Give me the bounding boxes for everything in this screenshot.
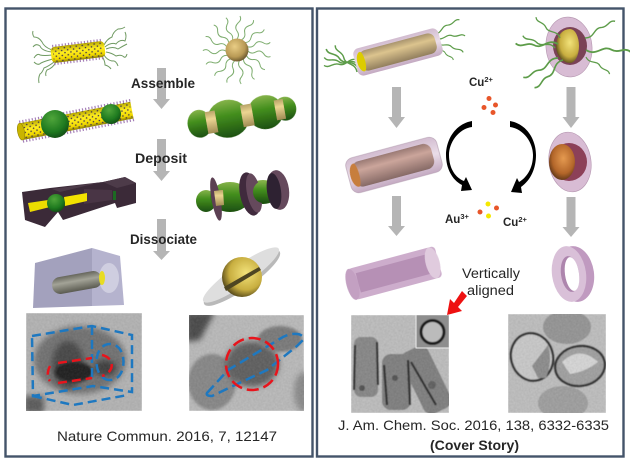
arrow: right column step 2 (562, 197, 580, 237)
heading: Deposit: Deposit (135, 150, 187, 166)
arrow: curved black left (446, 121, 472, 191)
panel: left, Nature Commun. assembly route (6, 8, 314, 456)
icon: rod in dark cuboid shell segments (22, 177, 136, 227)
label: Au3+: Au (445, 214, 460, 226)
arrow: left column step 2 (388, 196, 405, 236)
icon: green lobes with dark discs (196, 169, 292, 221)
icon: polymer-coated sphere in shell (516, 15, 630, 92)
image: TEM of nanorings (508, 314, 606, 413)
icon: rod in shell, copper (344, 135, 444, 195)
icon: sphere in shell, copper (545, 129, 595, 195)
arrow: red pointer to inset (447, 291, 467, 315)
arrow: deposit (153, 139, 170, 181)
label: Cu2+ released: 2+ (518, 215, 528, 224)
icon: hollow nanotube (343, 246, 444, 301)
arrow: curved black right (510, 121, 536, 193)
heading: Dissociate: Dissociate (130, 231, 197, 247)
label: Vertically aligned: Vertically (462, 266, 520, 281)
label: Cu2+: 2+ (484, 75, 494, 84)
panel: right, J. Am. Chem. Soc. cation exchange route (317, 8, 630, 456)
citation: J. Am. Chem. Soc.: J. Am. Chem. Soc. 2016, 138, 6332-6335 (338, 417, 609, 433)
label: Vertically aligned (462, 266, 520, 298)
arrow: left column step 1 (388, 87, 405, 128)
icon: hollow ring (548, 244, 598, 304)
arrow: dissociate (153, 219, 170, 260)
icon: polymer-coated gold nanorod (33, 27, 127, 83)
image: TEM of hollow cuboid with dashed outlines (24, 313, 142, 413)
image: TEM of nanotubes with inset (351, 315, 454, 417)
icon: mixed Au3+ and Cu2+ ions (478, 202, 499, 218)
image: TEM of sphere with dashed outlines (189, 315, 304, 411)
label: Vertically aligned: aligned (467, 283, 514, 298)
icon: Cu2+ ions (482, 96, 498, 115)
icon: polymer-coated rod in shell (324, 16, 465, 77)
icon: hollow cuboid shell with nanorod (33, 248, 124, 308)
arrow: right column step 1 (562, 87, 580, 128)
icon: gold sphere with grey disc ring (198, 240, 286, 313)
label: Au3+: 3+ (460, 212, 470, 221)
icon: polymer-coated gold sphere (203, 16, 271, 84)
icon: sphere-chain with green lobes and gold bands (184, 88, 299, 145)
icon: rod with green polymer beads (16, 100, 135, 142)
citation note: Cover Story: (Cover Story) (430, 438, 519, 453)
label: Cu2+ released: Cu (503, 217, 518, 229)
citation: Nature Commun.: Nature Commun. 2016, 7, 12147 (57, 428, 277, 444)
label: Cu2+: Cu (469, 77, 484, 89)
heading: Assemble: Assemble (131, 75, 195, 91)
arrow: assemble (153, 68, 170, 109)
